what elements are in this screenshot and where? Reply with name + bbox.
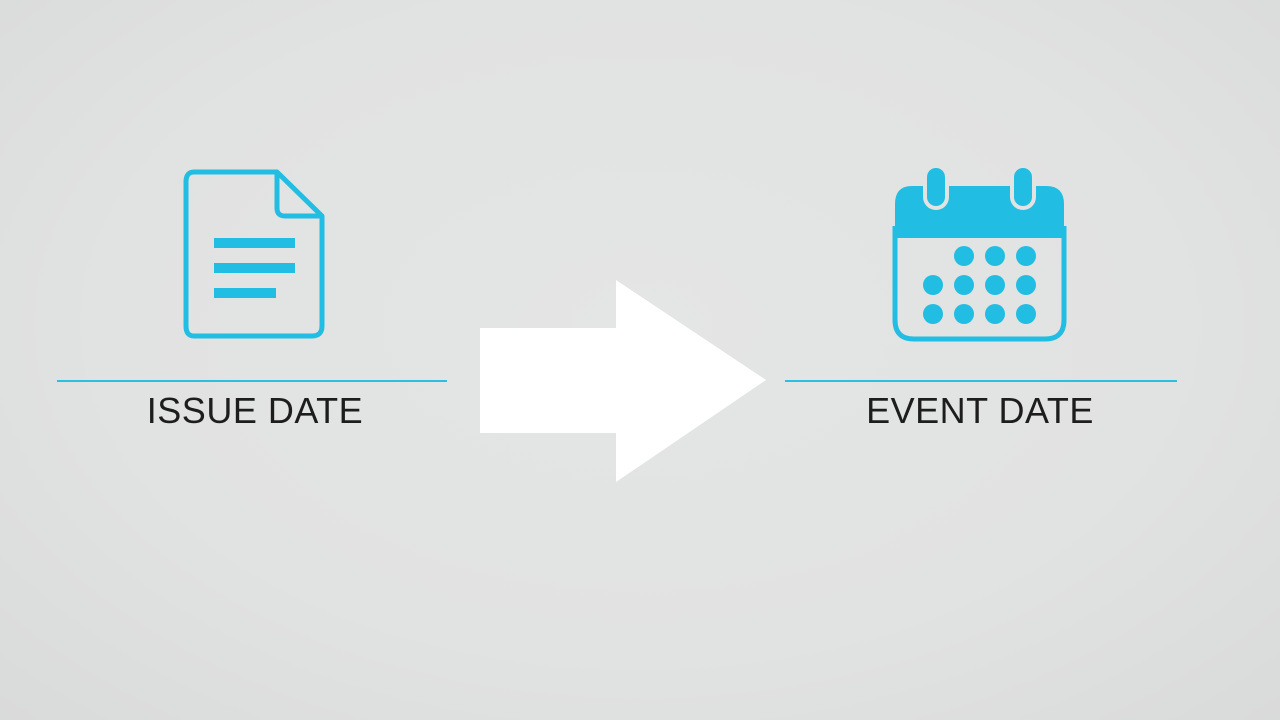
line: issue bbox=[57, 380, 447, 382]
icon: document bbox=[184, 170, 324, 338]
label: event date: EVENT DATE bbox=[866, 390, 1094, 431]
arrow bbox=[480, 280, 766, 482]
line: event bbox=[785, 380, 1177, 382]
label: issue date: ISSUE DATE bbox=[147, 390, 363, 431]
icon: calendar bbox=[892, 168, 1066, 342]
